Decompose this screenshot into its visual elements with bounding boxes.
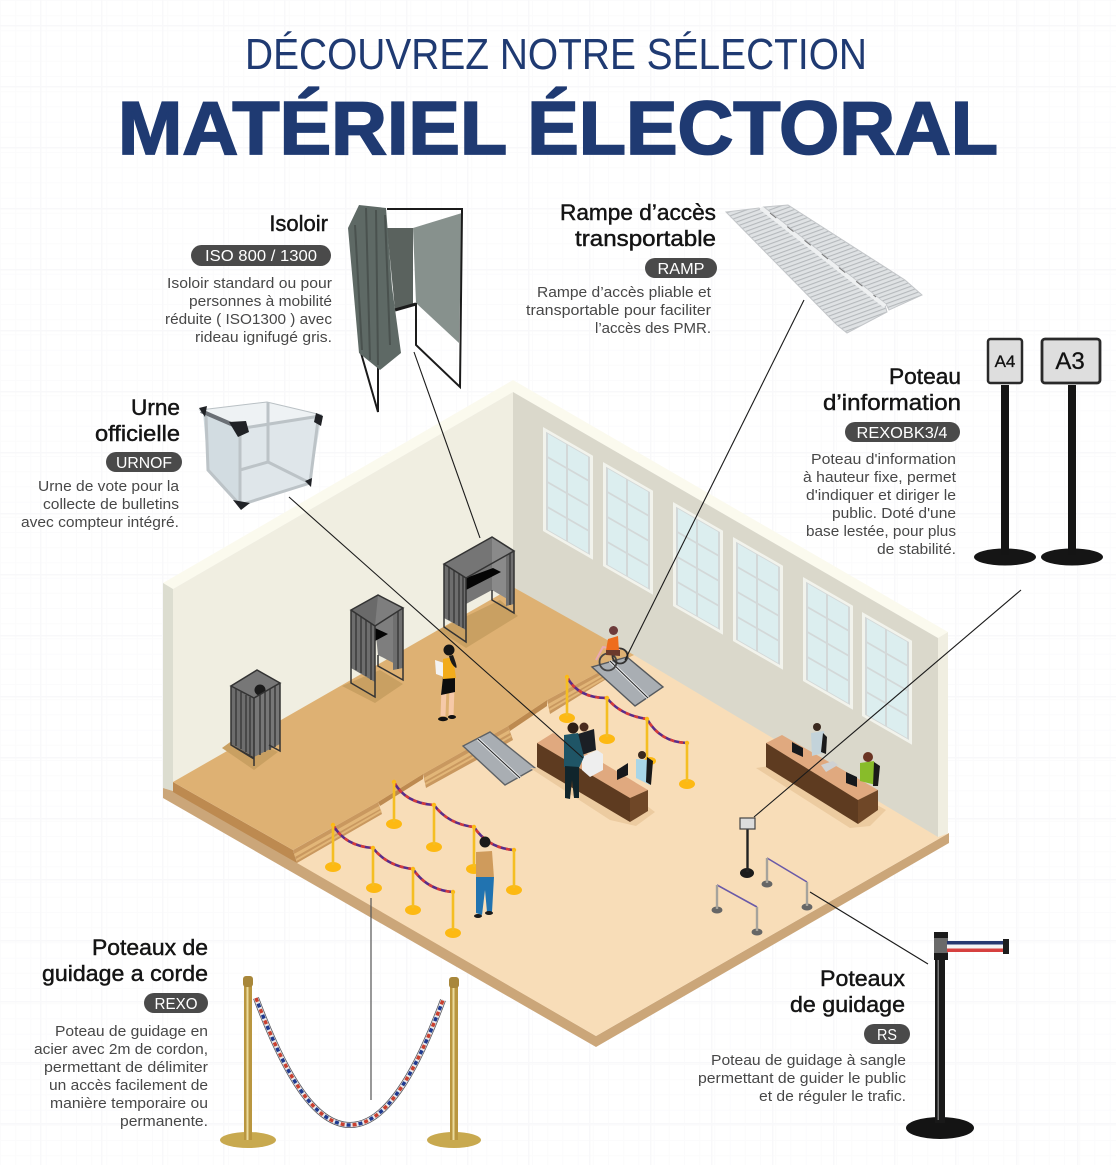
panel: urne — [21, 395, 182, 531]
access ramp in room, lower — [463, 732, 535, 785]
photo: retractable belt post — [906, 932, 1009, 1139]
description guidage: et de réguler le trafic. — [759, 1088, 906, 1105]
panel: isoloir — [165, 211, 333, 346]
description urne: avec compteur intégré. — [21, 514, 179, 531]
badge RAMP: RAMP — [658, 261, 704, 278]
panel: poteaux de guidage: Poteaux — [820, 966, 905, 991]
badge RS: RS — [877, 1027, 897, 1044]
photo: access ramp — [726, 205, 922, 333]
description rampe: l’accès des PMR. — [595, 320, 711, 337]
description corde: un accès facilement de — [49, 1077, 208, 1094]
description isoloir: réduite ( ISO1300 ) avec — [165, 311, 333, 328]
badge REXOBK — [845, 422, 960, 442]
panel: poteaux de guidage a corde: Poteaux de — [92, 935, 208, 960]
description isoloir: Isoloir standard ou pour — [167, 275, 332, 292]
description rampe: Rampe d’accès pliable et — [537, 284, 712, 301]
voting booth: with shelf — [342, 595, 403, 703]
badge URNOF — [106, 452, 182, 472]
description corde: permettant de délimiter — [44, 1059, 208, 1076]
panel: poteaux de guidage — [698, 966, 910, 1105]
description corde: permanente. — [120, 1113, 208, 1130]
description poteau d'information: public. Doté d'une — [832, 505, 956, 522]
badge RAMP — [645, 258, 717, 278]
man queuing — [474, 836, 494, 918]
description isoloir: personnes à mobilité — [189, 293, 332, 310]
room walls — [163, 380, 948, 840]
title — [118, 30, 998, 170]
photo: information posts: A4 — [995, 352, 1015, 371]
description isoloir: rideau ignifugé gris. — [195, 329, 332, 346]
panel: isoloir: Isoloir — [269, 211, 328, 236]
description corde: acier avec 2m de cordon, — [34, 1041, 208, 1058]
description poteau d'information: de stabilité. — [877, 541, 956, 558]
description corde — [34, 1023, 208, 1130]
chrome stanchions with belt — [712, 858, 812, 936]
description isoloir — [165, 275, 333, 346]
wheelchair user — [596, 626, 628, 670]
description poteau d'information: d'indiquer et diriger le — [806, 487, 956, 504]
panel: urne: officielle — [95, 421, 180, 446]
voting booth: closed — [222, 670, 280, 770]
panel: poteau d'information: Poteau — [889, 364, 961, 389]
description poteau d'information: Poteau d'information — [811, 451, 956, 468]
photo: information posts: A3 — [1055, 348, 1085, 375]
title: MATÉRIEL ÉLECTORAL — [118, 86, 998, 170]
photo: gold stanchions with rope — [220, 976, 481, 1148]
isometric room — [163, 380, 949, 1047]
description corde: Poteau de guidage en — [55, 1023, 208, 1040]
ballot box — [582, 750, 603, 777]
description urne — [21, 478, 180, 531]
leader lines — [289, 300, 1021, 1100]
voting booth: open — [438, 537, 518, 648]
desk with voters — [530, 722, 655, 826]
badge ISO: ISO 800 / 1300 — [205, 248, 317, 265]
officer in black — [578, 722, 596, 755]
description urne: collecte de bulletins — [43, 496, 179, 513]
description guidage: Poteau de guidage à sangle — [711, 1052, 906, 1069]
lower yellow stanchions and ropes — [325, 780, 522, 938]
badge RS — [864, 1024, 910, 1044]
photo: information posts — [974, 339, 1103, 566]
badge ISO — [191, 245, 331, 266]
panel: rampe: transportable — [575, 226, 716, 251]
voter in teal — [564, 722, 584, 799]
description guidage: permettant de guider le public — [698, 1070, 907, 1087]
badge REXOBK: REXOBK3/4 — [856, 425, 948, 442]
description rampe: transportable pour faciliter — [526, 302, 711, 319]
badge REXO: REXO — [154, 996, 198, 1013]
photo: polling booth — [348, 205, 462, 412]
description guidage — [698, 1052, 907, 1105]
information post in room — [740, 818, 755, 878]
description poteau d'information: base lestée, pour plus — [806, 523, 956, 540]
description poteau d'information: à hauteur fixe, permet — [803, 469, 957, 486]
upper yellow stanchions and ropes — [559, 675, 695, 789]
title: DÉCOUVREZ NOTRE SÉLECTION — [245, 30, 867, 79]
photo: ballot box — [199, 402, 323, 510]
windows — [543, 427, 912, 745]
desk at right — [756, 723, 886, 828]
panel: poteau d'information: d’information — [823, 390, 961, 415]
panel: poteaux de guidage a corde: guidage a corde — [42, 961, 208, 986]
panel: rampe: Rampe d’accès — [560, 200, 716, 225]
panel: rampe — [526, 200, 717, 337]
panel: urne: Urne — [131, 395, 180, 420]
lower floor — [163, 640, 949, 1047]
badge URNOF: URNOF — [116, 455, 172, 472]
woman voter — [435, 644, 457, 721]
badge REXO — [144, 993, 208, 1013]
panel: poteau d'information — [803, 364, 961, 558]
panel: poteaux de guidage a corde — [34, 935, 208, 1130]
description urne: Urne de vote pour la — [38, 478, 180, 495]
description poteau d'information — [803, 451, 957, 558]
poll worker, woman in blue — [617, 751, 653, 785]
access ramp in room, upper — [592, 657, 663, 706]
panel: poteaux de guidage: de guidage — [790, 992, 905, 1017]
description corde: manière temporaire ou — [50, 1095, 208, 1112]
raised platform — [173, 587, 634, 863]
description rampe — [526, 284, 712, 337]
